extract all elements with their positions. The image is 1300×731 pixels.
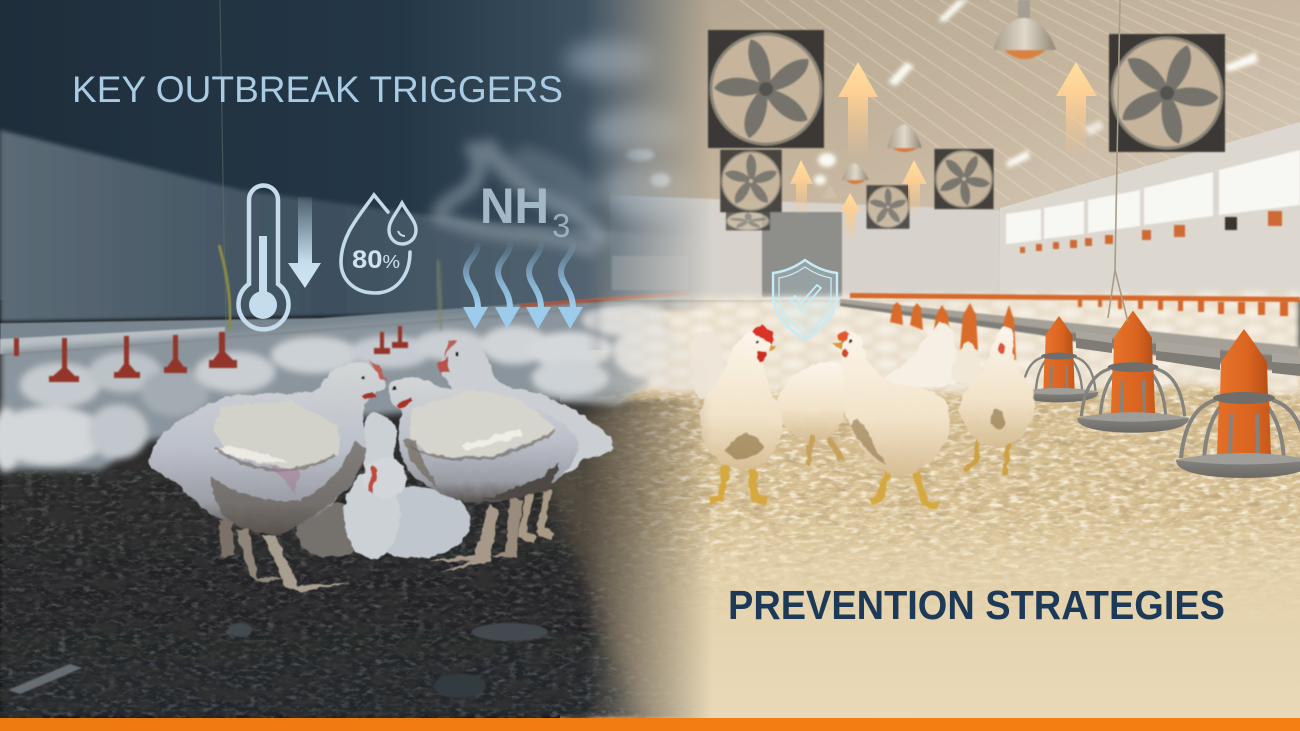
down arrow [288,197,321,288]
red drinkers [14,326,408,382]
heading: key outbreak triggers: KEY OUTBREAK TRIGGERS [72,69,563,110]
icon: protection shield [773,260,837,340]
orange footer bar [0,718,1300,731]
dark flock [0,300,710,472]
healthy chicken left [700,324,783,501]
water rail [0,292,690,354]
wavy arrow 2 [495,243,520,329]
sitting chickens [296,412,470,558]
healthy chicken centre [832,330,950,506]
background flock [600,292,1300,395]
back chickens [690,323,982,466]
side windows [1006,150,1300,244]
humidity value: 80% [352,246,400,274]
floor debris [8,623,548,698]
small arrow 3 [840,193,861,242]
left scene: dark disease-prone house, blended into right [0,0,730,718]
small arrow 2 [902,160,927,216]
mid fan left [720,150,782,212]
ceiling glow streaks [565,40,700,216]
side wall [1000,122,1300,300]
hanging cables [1108,0,1128,322]
wavy arrow 3 [526,243,551,329]
litter floor [560,350,1300,718]
hanging poles [220,0,226,320]
ceiling ribs [740,0,1300,200]
back wall [610,195,1000,300]
icon: 80% humidity drop [341,195,416,293]
upper wall and ceiling [0,0,730,300]
sick chicken front centre [388,377,580,572]
healthy chicken right [960,327,1034,475]
sick chicken front left [149,360,388,592]
wavy arrow 1 [463,243,488,329]
feeder far [1020,316,1098,402]
floor [0,400,730,718]
icon: ammonia NH3 [480,178,570,244]
cut fan [726,212,770,230]
side wall [0,130,730,322]
feeder middle [1077,311,1189,433]
ceiling lights [626,0,1258,187]
distant feeders [890,302,1016,360]
wavy arrow 4 [558,243,583,329]
thermometer [238,186,289,329]
rear door [762,212,842,297]
pale foreground floor [560,510,1300,718]
litter transition [540,394,687,716]
hanging lamps [822,0,1056,198]
right scene: bright clean poultry house [560,0,1300,718]
heading: prevention strategies: PREVENTION STRATEGIES [728,582,1225,628]
large fan right [1099,24,1237,159]
side wall vents [1020,211,1282,253]
ammonia down arrows [463,243,583,329]
feed line pipe [840,299,1300,374]
ceiling [560,0,1300,300]
icon: thermometer falling [238,186,321,329]
large arrow right [1056,62,1097,158]
far fan [867,185,909,229]
fans [702,24,1237,230]
large fan left [702,25,829,149]
icon: ammonia NH3: NH [480,178,549,234]
large arrow left [838,62,878,158]
orange drinker rows in distance [850,293,1300,316]
small arrow 1 [790,160,813,216]
rear wall panel [612,256,668,290]
pipe front sections [1076,330,1300,376]
icon: ammonia NH3: 3 [552,207,570,244]
feeder near [1176,329,1300,478]
ammonia smoke [438,148,600,250]
airflow up arrows [790,62,1097,242]
sick chicken group [149,340,614,592]
sick chicken rear right [437,340,614,540]
mid fan right [929,143,1000,214]
